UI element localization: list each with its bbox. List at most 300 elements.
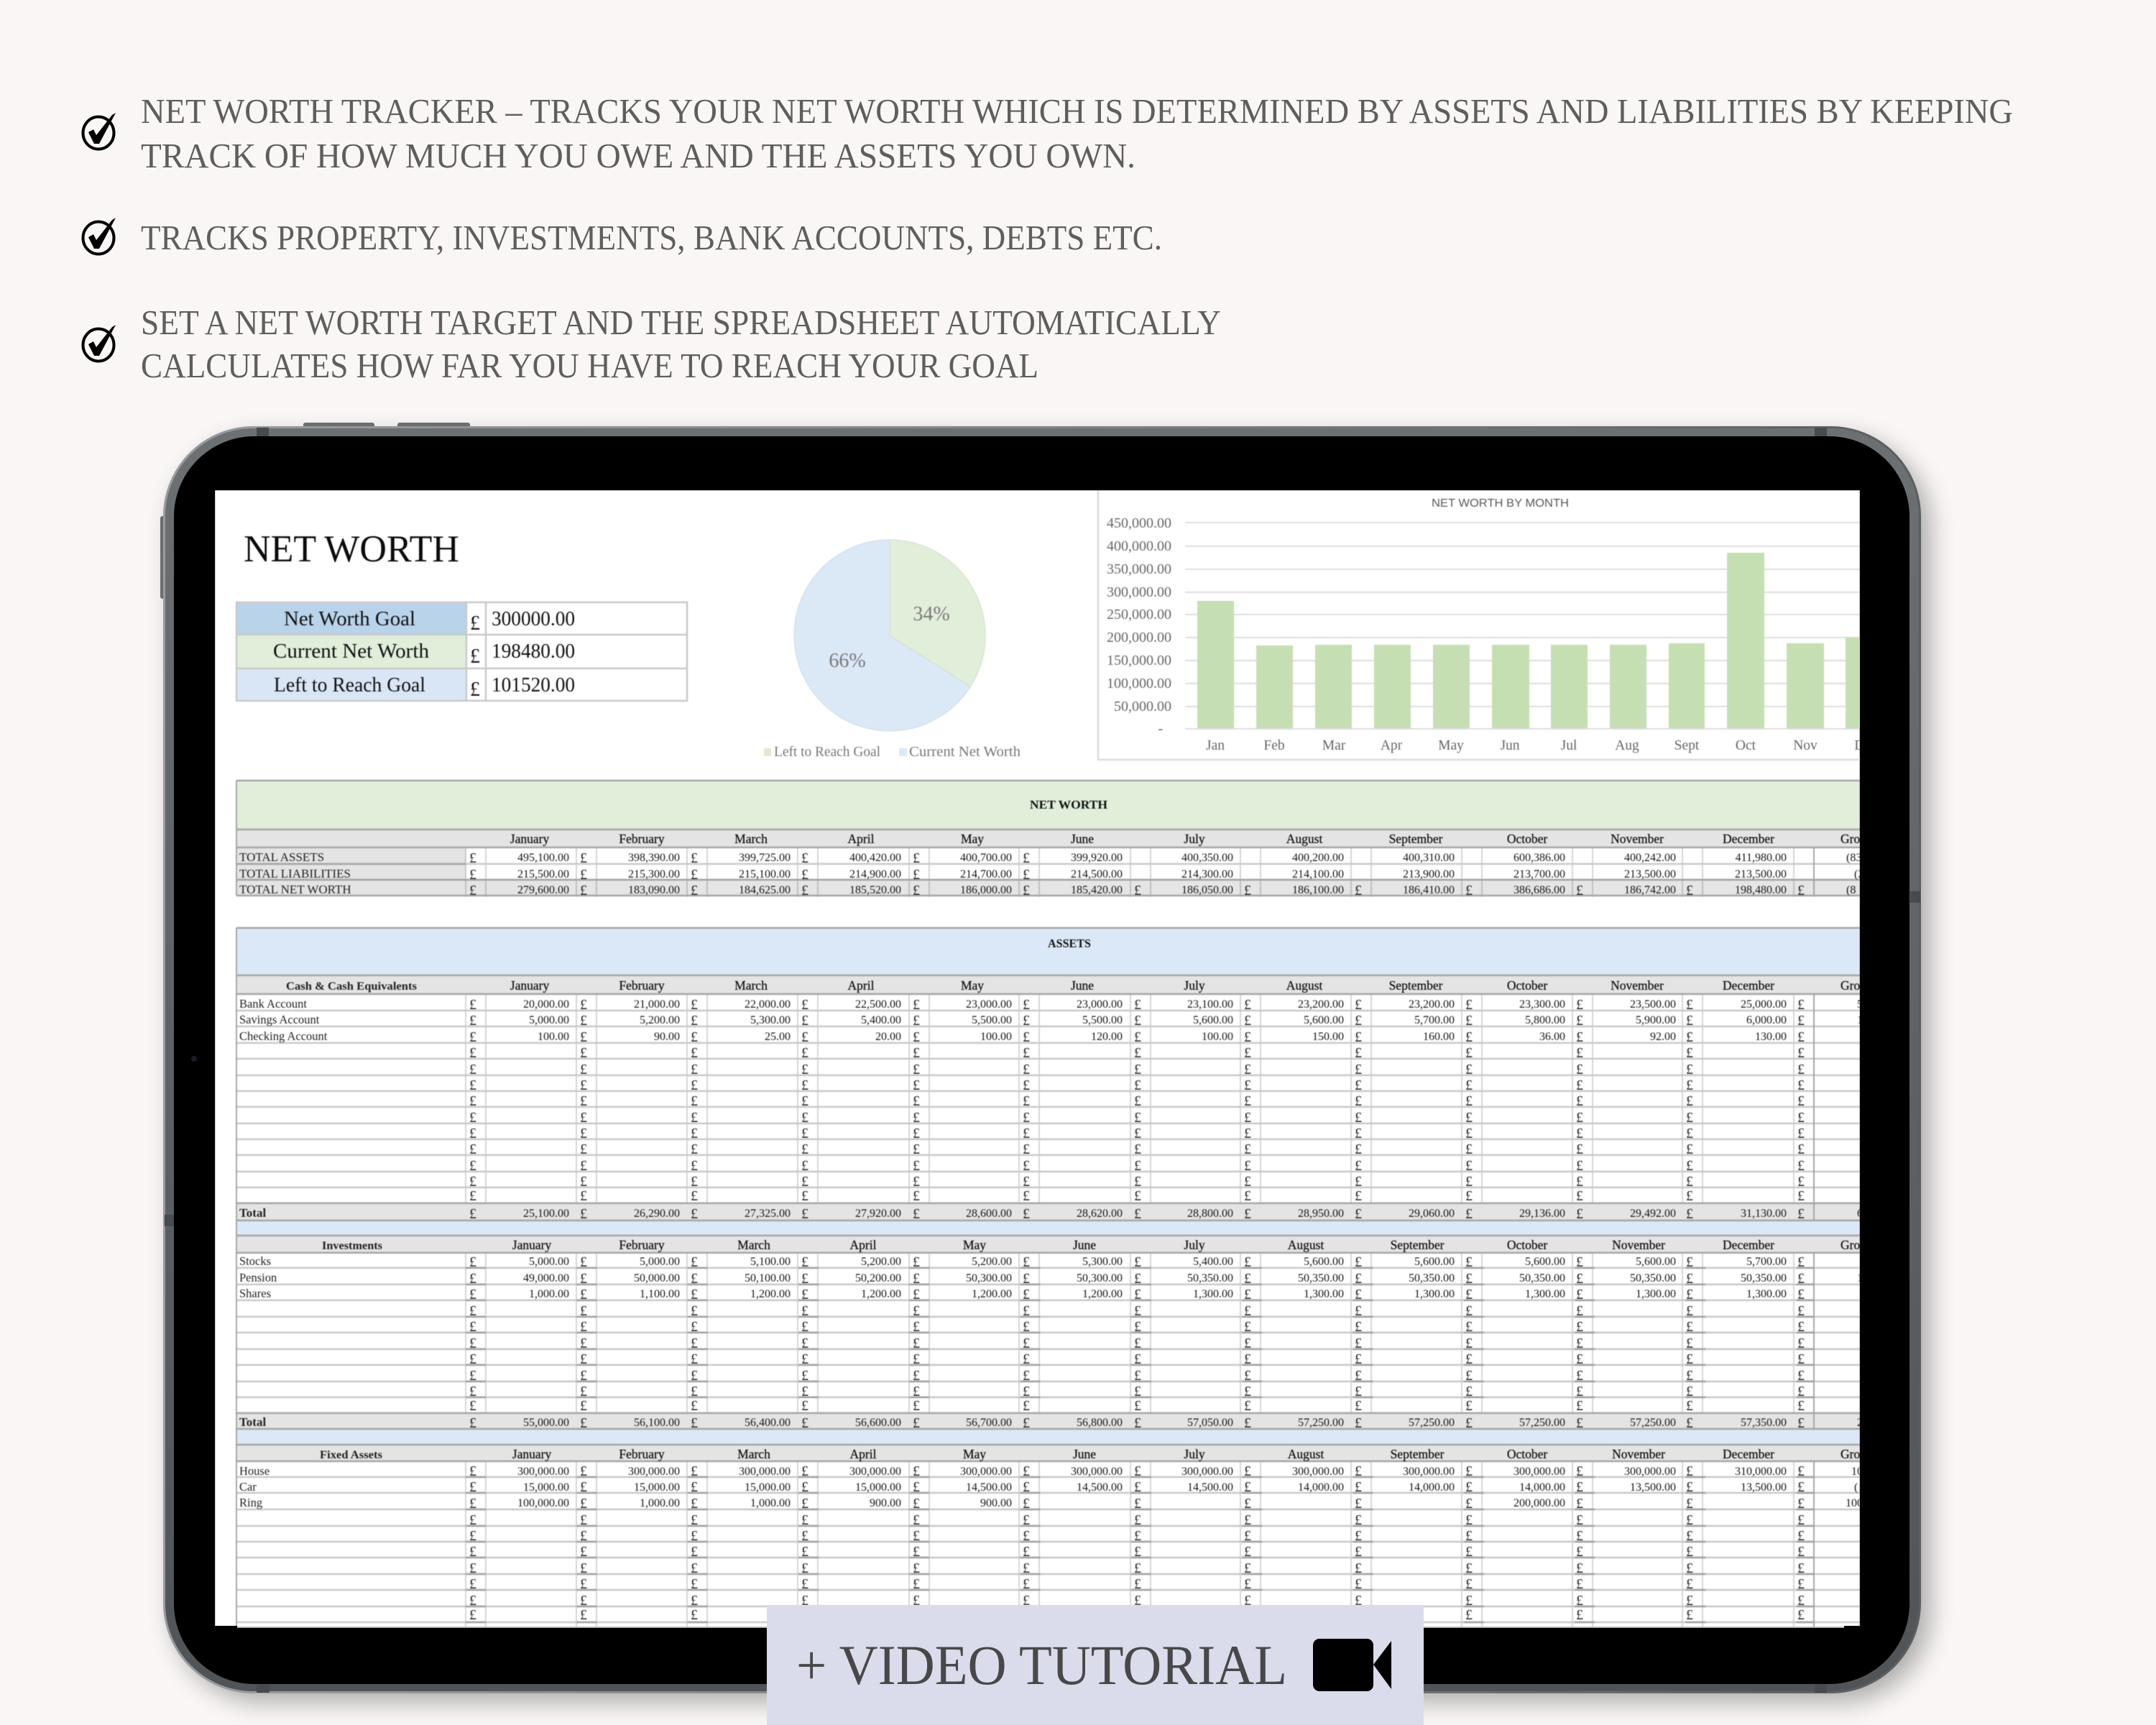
- summary: current net worth: Current Net Worth: [273, 640, 429, 663]
- row: investments total: 57,250.00: [1630, 1417, 1676, 1429]
- empty pound-sign rows: investments: £££££££££££££: [469, 1398, 1805, 1414]
- empty pound-sign rows: cash: [469, 1045, 1805, 1204]
- month headers: net worth: July: [1184, 832, 1205, 846]
- month headers: fixed assets: May: [963, 1447, 986, 1461]
- month headers: net worth: April: [848, 832, 875, 846]
- row: investments total: 2: [1857, 1417, 1863, 1429]
- month headers: net worth: March: [734, 832, 768, 846]
- row: bank account: 23,200.00: [1409, 998, 1455, 1011]
- row: house: 300,000.00: [849, 1466, 901, 1478]
- row: house: 300,000.00: [628, 1466, 680, 1478]
- row: house: 300,000.00: [960, 1466, 1012, 1478]
- empty pound-sign rows: fixed assets: £££££££££££££: [469, 1593, 1805, 1609]
- empty pound-sign rows: cash: £££££££££££££: [469, 1110, 1805, 1126]
- row: car: 13,500.00: [1630, 1481, 1676, 1494]
- month headers: investments: November: [1612, 1238, 1665, 1252]
- bullet 1 text: TRACK OF HOW MUCH YOU OWE AND THE ASSETS YOU OWN.: [141, 136, 1135, 175]
- month headers: fixed assets: February: [619, 1447, 665, 1461]
- row: bank account: 23,200.00: [1298, 998, 1344, 1011]
- row: house: 300,000.00: [1624, 1466, 1676, 1478]
- month headers: fixed assets: Fixed Assets: [320, 1449, 382, 1461]
- row: car: (1: [1854, 1481, 1864, 1494]
- row: savings account: 5,500.00: [1082, 1014, 1123, 1026]
- row: total liabilities: 214,700.00: [960, 868, 1012, 880]
- month headers: cash: June: [1071, 978, 1094, 993]
- y axis labels: 250,000.00: [1107, 607, 1171, 622]
- row: cash total: 25,100.00: [523, 1208, 569, 1220]
- pie slice: 66%: [794, 540, 970, 731]
- row: total liabilities: 213,900.00: [1403, 868, 1455, 880]
- row: checking account: Checking Account: [239, 1029, 328, 1043]
- summary: net worth goal: [284, 610, 575, 630]
- x axis labels: Dec: [1854, 738, 1877, 753]
- summary: current net worth: [273, 643, 575, 663]
- row: cash total: 28,600.00: [966, 1208, 1012, 1220]
- row: total assets: 400,700.00: [960, 852, 1012, 864]
- section title: assets: ASSETS: [1048, 937, 1091, 950]
- row: house: 300,000.00: [1071, 1466, 1123, 1478]
- month headers: investments: September: [1391, 1238, 1445, 1252]
- row: bank account: 22,500.00: [855, 998, 901, 1011]
- row: total net worth: £££££££££££££: [469, 883, 1805, 898]
- row: car: 14,500.00: [1187, 1481, 1233, 1494]
- row: ring: 1,000.00: [750, 1497, 791, 1509]
- row: checking account: 120.00: [1091, 1031, 1123, 1043]
- row: savings account: 5,900.00: [1636, 1014, 1676, 1026]
- row: total assets: 495,100.00: [517, 852, 569, 864]
- y axis labels: 450,000.00: [1107, 515, 1171, 531]
- band: fixed months: [236, 1445, 1860, 1461]
- row: total liabilities: 214,300.00: [1181, 868, 1233, 880]
- month headers: cash: March: [734, 978, 768, 993]
- row: shares: 1,300.00: [1525, 1288, 1565, 1300]
- x axis labels: Feb: [1263, 738, 1285, 753]
- bullet 3 text: SET A NET WORTH TARGET AND THE SPREADSHEET AUTOMATICALLY: [141, 303, 1221, 342]
- empty pound-sign rows: investments: £££££££££££££: [469, 1303, 1805, 1319]
- row: total assets: 399,920.00: [1071, 852, 1123, 864]
- x axis labels: [1206, 738, 1877, 753]
- x axis labels: Apr: [1381, 738, 1403, 753]
- empty pound-sign rows: cash: £££££££££££££: [469, 1045, 1805, 1061]
- x axis labels: Sept: [1674, 738, 1700, 753]
- row: shares: 1,000.00: [529, 1288, 569, 1300]
- month headers: investments: March: [737, 1238, 770, 1252]
- row: cash total: 29,136.00: [1519, 1208, 1565, 1220]
- row: house: 300,000.00: [517, 1466, 569, 1478]
- month headers: investments: June: [1073, 1238, 1096, 1252]
- icon: check mark 3: [83, 325, 116, 361]
- x axis labels: Mar: [1322, 738, 1346, 753]
- y axis labels: 50,000.00: [1114, 699, 1171, 714]
- row: cash total: 28,950.00: [1298, 1208, 1344, 1220]
- month headers: net worth: June: [1071, 832, 1094, 846]
- bullet 1 text: NET WORTH TRACKER – TRACKS YOUR NET WORTH WHICH IS DETERMINED BY ASSETS AND LIABILITIES BY KEEPING: [141, 91, 2013, 131]
- month headers: investments: April: [850, 1238, 877, 1252]
- row: ring: £££££££££££££: [469, 1496, 1805, 1512]
- month headers: net worth: February: [619, 832, 665, 846]
- month headers: cash: Cash & Cash Equivalents: [286, 980, 417, 993]
- empty pound-sign rows: fixed assets: £££££££££££££: [469, 1512, 1805, 1528]
- screen bottom corner notches: [215, 1626, 1860, 1628]
- row: car: 14,500.00: [1077, 1481, 1123, 1494]
- row: car: 14,500.00: [966, 1481, 1012, 1494]
- row: bank account: Bank Account: [239, 997, 307, 1011]
- row: house: 10: [1851, 1466, 1863, 1478]
- row: bank account: 23,300.00: [1519, 998, 1565, 1011]
- row: total liabilities: 215,500.00: [517, 868, 569, 880]
- row: pension: 49,000.00: [523, 1272, 569, 1284]
- row: house: House: [239, 1464, 270, 1478]
- row: total assets: ££££££: [469, 850, 1030, 866]
- row: total net worth: 183,090.00: [628, 884, 680, 896]
- row: total liabilities: TOTAL LIABILITIES: [239, 867, 351, 880]
- row: shares: 1,200.00: [972, 1288, 1012, 1300]
- month headers: investments: Investments: [322, 1240, 382, 1252]
- row: pension: 50,350.00: [1298, 1272, 1344, 1284]
- y axis labels: 150,000.00: [1107, 653, 1171, 668]
- row: savings account: 5,500.00: [972, 1014, 1012, 1026]
- empty pound-sign rows: fixed assets: £££££££££££££: [469, 1607, 1805, 1623]
- pie labels: 34%: [913, 603, 950, 625]
- feature list: [83, 91, 2013, 385]
- y axis labels: 100,000.00: [1107, 676, 1171, 691]
- row: checking account: 92.00: [1650, 1031, 1676, 1043]
- row: cash total: 28,800.00: [1187, 1208, 1233, 1220]
- row: pension: 1: [1857, 1272, 1863, 1284]
- row: bank account: 20,000.00: [523, 998, 569, 1011]
- row: savings account: £££££££££££££: [469, 1013, 1805, 1029]
- row: stocks: 5,600.00: [1414, 1256, 1455, 1268]
- row: shares: 1,300.00: [1414, 1288, 1455, 1300]
- callout text: + VIDEO TUTORIAL: [796, 1634, 1287, 1696]
- row: savings account: 5,000.00: [529, 1014, 569, 1026]
- row: checking account: 100.00: [538, 1031, 569, 1043]
- empty pound-sign rows: cash: £££££££££££££: [469, 1093, 1805, 1109]
- bullet 3 text: CALCULATES HOW FAR YOU HAVE TO REACH YOUR GOAL: [141, 346, 1038, 385]
- callout background: [767, 1605, 1424, 1725]
- row: pension: 50,200.00: [855, 1272, 901, 1284]
- month headers: cash: July: [1184, 978, 1205, 993]
- month headers: fixed assets: [320, 1447, 1879, 1461]
- row: shares: 1,300.00: [1636, 1288, 1676, 1300]
- row: savings account: 5,700.00: [1414, 1014, 1455, 1026]
- row: cash total: 27,920.00: [855, 1208, 901, 1220]
- row: bank account: 22,000.00: [745, 998, 791, 1011]
- row: stocks: 5,100.00: [750, 1256, 791, 1268]
- month headers: fixed assets: December: [1723, 1447, 1774, 1461]
- month headers: net worth: November: [1611, 832, 1664, 846]
- row: shares: 1,300.00: [1746, 1288, 1787, 1300]
- section: net worth: [239, 798, 1879, 898]
- row: car: Car: [239, 1480, 257, 1494]
- row: investments total: 57,250.00: [1519, 1417, 1565, 1429]
- month headers: cash: February: [619, 978, 665, 993]
- row: total net worth: 185,520.00: [849, 884, 901, 896]
- row: savings account: 1: [1857, 1014, 1863, 1026]
- row: total liabilities: 215,100.00: [739, 868, 791, 880]
- y axis labels: 400,000.00: [1107, 538, 1171, 554]
- row: checking account: 20.00: [875, 1031, 901, 1043]
- row: total liabilities: ££££££: [469, 867, 1030, 883]
- row: ring: 200,000.00: [1514, 1497, 1565, 1509]
- row: bank account: 23,100.00: [1187, 998, 1233, 1011]
- month headers: cash: [286, 978, 1879, 993]
- x axis labels: Nov: [1793, 738, 1818, 753]
- row: checking account: 160.00: [1423, 1031, 1455, 1043]
- row: ring: 900.00: [870, 1497, 901, 1509]
- row: car: £££££££££££££: [469, 1479, 1805, 1495]
- summary: net worth goal: 300000.00: [492, 608, 575, 630]
- empty pound-sign rows: fixed assets: [469, 1512, 1805, 1623]
- month headers: fixed assets: September: [1391, 1447, 1445, 1461]
- row: total liabilities: 214,100.00: [1292, 868, 1344, 880]
- month headers: cash: October: [1507, 978, 1547, 993]
- month headers: cash: Growth: [1841, 978, 1879, 993]
- pie legend: [763, 745, 1021, 757]
- month headers: fixed assets: April: [850, 1447, 877, 1461]
- row: total assets: 400,242.00: [1624, 852, 1676, 864]
- row: investments total: 57,350.00: [1741, 1417, 1787, 1429]
- row: total assets: 411,980.00: [1736, 852, 1787, 864]
- month headers: investments: August: [1288, 1238, 1324, 1252]
- row: total liabilities: [239, 867, 1864, 883]
- row: cash total: Total: [239, 1206, 266, 1220]
- month headers: cash: January: [510, 978, 549, 993]
- icon: check mark 1: [83, 113, 116, 150]
- empty pound-sign rows: fixed assets: £££££££££££££: [469, 1576, 1805, 1592]
- row: cash total: 29,060.00: [1409, 1208, 1455, 1220]
- row: stocks: £££££££££££££: [469, 1254, 1805, 1270]
- month headers: cash: December: [1723, 978, 1774, 993]
- row: total assets: 600,386.00: [1514, 852, 1565, 864]
- month headers: cash: November: [1611, 978, 1664, 993]
- month headers: investments: [322, 1238, 1879, 1252]
- row: total liabilities: 214,900.00: [849, 868, 901, 880]
- month headers: investments: February: [619, 1238, 665, 1252]
- empty pound-sign rows: cash: £££££££££££££: [469, 1126, 1805, 1141]
- row: car: 14,000.00: [1298, 1481, 1344, 1494]
- month headers: investments: January: [512, 1238, 551, 1252]
- row: cash total: 6: [1857, 1208, 1863, 1220]
- row: checking account: 36.00: [1539, 1031, 1565, 1043]
- tablet frame: [164, 427, 1920, 1693]
- summary: left to reach goal: [274, 676, 575, 696]
- row: investments total: 55,000.00: [523, 1417, 569, 1429]
- row: pension: 50,350.00: [1519, 1272, 1565, 1284]
- row: stocks: 5,400.00: [1193, 1256, 1233, 1268]
- month headers: fixed assets: November: [1612, 1447, 1665, 1461]
- empty pound-sign rows: investments: [469, 1303, 1805, 1414]
- row: stocks: 5,200.00: [972, 1256, 1012, 1268]
- row: bank account: 21,000.00: [634, 998, 680, 1011]
- y axis labels: 300,000.00: [1107, 584, 1171, 600]
- row: total net worth: 386,686.00: [1514, 884, 1565, 896]
- row: investments total: 57,050.00: [1187, 1417, 1233, 1429]
- month headers: fixed assets: July: [1184, 1447, 1205, 1461]
- pie legend: Current Net Worth: [909, 745, 1021, 760]
- row: house: £££££££££££££: [469, 1463, 1805, 1479]
- x axis labels: Aug: [1615, 738, 1639, 753]
- row: total assets: 400,310.00: [1403, 852, 1455, 864]
- row: pension: 50,350.00: [1630, 1272, 1676, 1284]
- summary: left to reach goal: 101520.00: [492, 674, 575, 696]
- icon: video camera: [1313, 1639, 1391, 1691]
- band: cash months: [236, 976, 1860, 994]
- row: pension: 50,000.00: [634, 1272, 680, 1284]
- empty pound-sign rows: cash: £££££££££££££: [469, 1141, 1805, 1157]
- row: stocks: 5,600.00: [1525, 1256, 1565, 1268]
- summary: current net worth: £: [470, 645, 480, 668]
- row: shares: 1,300.00: [1304, 1288, 1344, 1300]
- row: car: 15,000.00: [634, 1481, 680, 1494]
- row: pension: 50,350.00: [1409, 1272, 1455, 1284]
- row: savings account: 6,000.00: [1746, 1014, 1787, 1026]
- summary: left to reach goal: £: [470, 678, 480, 701]
- row: total liabilities: 214,500.00: [1071, 868, 1123, 880]
- empty pound-sign rows: cash: £££££££££££££: [469, 1158, 1805, 1174]
- row: ring: 100: [1846, 1497, 1863, 1509]
- bullet 2 text: TRACKS PROPERTY, INVESTMENTS, BANK ACCOUNTS, DEBTS ETC.: [141, 218, 1162, 257]
- summary: net worth goal: £: [470, 612, 480, 635]
- band: investments total: [236, 1414, 1860, 1429]
- row: ring: 900.00: [980, 1497, 1012, 1509]
- row: shares: £££££££££££££: [469, 1287, 1805, 1302]
- month headers: fixed assets: Growth: [1841, 1447, 1879, 1461]
- month headers: net worth: [510, 832, 1879, 846]
- empty pound-sign rows: cash: £££££££££££££: [469, 1062, 1805, 1077]
- row: pension: 50,100.00: [745, 1272, 791, 1284]
- x axis labels: Jul: [1561, 738, 1577, 753]
- row: savings account: 5,200.00: [640, 1014, 680, 1026]
- row: savings account: 5,600.00: [1304, 1014, 1344, 1026]
- row: investments total: 56,400.00: [745, 1417, 791, 1429]
- row: total assets: 400,350.00: [1181, 852, 1233, 864]
- row: shares: Shares: [239, 1287, 271, 1300]
- month headers: net worth: December: [1723, 832, 1774, 846]
- row: total net worth: 186,742.00: [1624, 884, 1676, 896]
- row: cash total: 27,325.00: [745, 1208, 791, 1220]
- month headers: net worth: August: [1286, 832, 1322, 846]
- bullet 3: [83, 303, 1221, 385]
- row: shares: 1,300.00: [1193, 1288, 1233, 1300]
- row: cash total: 29,492.00: [1630, 1208, 1676, 1220]
- empty pound-sign rows: cash: £££££££££££££: [469, 1188, 1805, 1204]
- month headers: cash: August: [1286, 978, 1322, 993]
- row: car: 13,500.00: [1741, 1481, 1787, 1494]
- tablet shadow: [172, 437, 1930, 1702]
- empty pound-sign rows: cash: £££££££££££££: [469, 1077, 1805, 1093]
- section title: net worth: NET WORTH: [1030, 798, 1107, 811]
- row: car: 15,000.00: [523, 1481, 569, 1494]
- x axis labels: Oct: [1736, 738, 1756, 753]
- row: checking account: 100.00: [1202, 1031, 1233, 1043]
- row: total assets: 399,725.00: [739, 852, 791, 864]
- row: checking account: 130.00: [1755, 1031, 1787, 1043]
- row: total liabilities: (2: [1854, 868, 1864, 880]
- row: checking account: 100.00: [980, 1031, 1012, 1043]
- row: pension: 50,300.00: [1077, 1272, 1123, 1284]
- x axis labels: May: [1438, 738, 1464, 753]
- row: shares: 1,200.00: [861, 1288, 901, 1300]
- empty pound-sign rows: fixed assets: £££££££££££££: [469, 1528, 1805, 1544]
- bullet 1 text: [141, 91, 2013, 175]
- bars: [1197, 553, 1867, 728]
- row: shares: 1,200.00: [1082, 1288, 1123, 1300]
- month headers: fixed assets: January: [512, 1447, 551, 1461]
- row: total net worth: 186,050.00: [1181, 884, 1233, 896]
- icon: camera dot: [191, 1056, 197, 1062]
- row: bank account: 23,500.00: [1630, 998, 1676, 1011]
- row: savings account: 5,400.00: [861, 1014, 901, 1026]
- row: car: 14,000.00: [1409, 1481, 1455, 1494]
- callout: video tutorial: [767, 1605, 1424, 1725]
- month headers: cash: May: [961, 978, 984, 993]
- pie chart: [764, 540, 1021, 760]
- row: investments total: 57,250.00: [1409, 1417, 1455, 1429]
- month headers: investments: May: [963, 1238, 986, 1252]
- row: investments total: 56,700.00: [966, 1417, 1012, 1429]
- row: shares: 1,200.00: [750, 1288, 791, 1300]
- row: stocks: 5,000.00: [529, 1256, 569, 1268]
- row: house: 300,000.00: [1181, 1466, 1233, 1478]
- summary: current net worth: 198480.00: [492, 640, 575, 663]
- month headers: net worth: Growth: [1841, 832, 1879, 846]
- pie legend: Left to Reach Goal: [774, 745, 881, 760]
- month headers: fixed assets: June: [1073, 1447, 1096, 1461]
- y axis labels: 350,000.00: [1107, 561, 1171, 577]
- row: stocks: 5,300.00: [1082, 1256, 1123, 1268]
- month headers: fixed assets: March: [737, 1447, 770, 1461]
- row: total assets: (83: [1846, 852, 1861, 864]
- row: total net worth: 186,100.00: [1292, 884, 1344, 896]
- net worth label cells: [236, 848, 1860, 896]
- row: house: 300,000.00: [739, 1466, 791, 1478]
- row: investments total: Total: [239, 1415, 266, 1429]
- row: pension: Pension: [239, 1271, 277, 1284]
- spreadsheet screen: [215, 490, 1879, 1628]
- row: total net worth: TOTAL NET WORTH: [239, 883, 351, 896]
- row: total net worth: 279,600.00: [517, 884, 569, 896]
- row: house: 300,000.00: [1514, 1466, 1565, 1478]
- row: cash total: 28,620.00: [1077, 1208, 1123, 1220]
- row: investments total: 56,800.00: [1077, 1417, 1123, 1429]
- row: car: 15,000.00: [855, 1481, 901, 1494]
- row: ring: 100,000.00: [517, 1497, 569, 1509]
- month headers: net worth: September: [1389, 832, 1443, 846]
- row: total net worth: 198,480.00: [1735, 884, 1787, 896]
- row: checking account: 150.00: [1312, 1031, 1344, 1043]
- row: pension: 50,300.00: [966, 1272, 1012, 1284]
- band: investments spacer: [236, 1220, 1860, 1236]
- month headers: cash: September: [1389, 978, 1443, 993]
- heading: net worth: NET WORTH: [244, 528, 459, 570]
- y axis labels: [1107, 515, 1171, 737]
- row: total net worth: (8: [1846, 884, 1856, 896]
- x axis labels: Jun: [1500, 738, 1520, 753]
- row: total assets: TOTAL ASSETS: [239, 850, 324, 864]
- row: total assets: 398,390.00: [628, 852, 680, 864]
- row: total liabilities: 213,700.00: [1514, 868, 1565, 880]
- row: pension: £££££££££££££: [469, 1271, 1805, 1287]
- chart title: NET WORTH BY MONTH: [1432, 497, 1569, 510]
- month headers: net worth: May: [961, 832, 984, 846]
- bar chart: net worth by month: [1098, 490, 1877, 760]
- empty pound-sign rows: fixed assets: £££££££££££££: [469, 1560, 1805, 1576]
- row: bank account: 23,000.00: [966, 998, 1012, 1011]
- pie slice: 34%: [890, 540, 985, 686]
- row: investments total: £££££££££££££: [469, 1415, 1805, 1431]
- month headers: net worth: January: [510, 832, 549, 846]
